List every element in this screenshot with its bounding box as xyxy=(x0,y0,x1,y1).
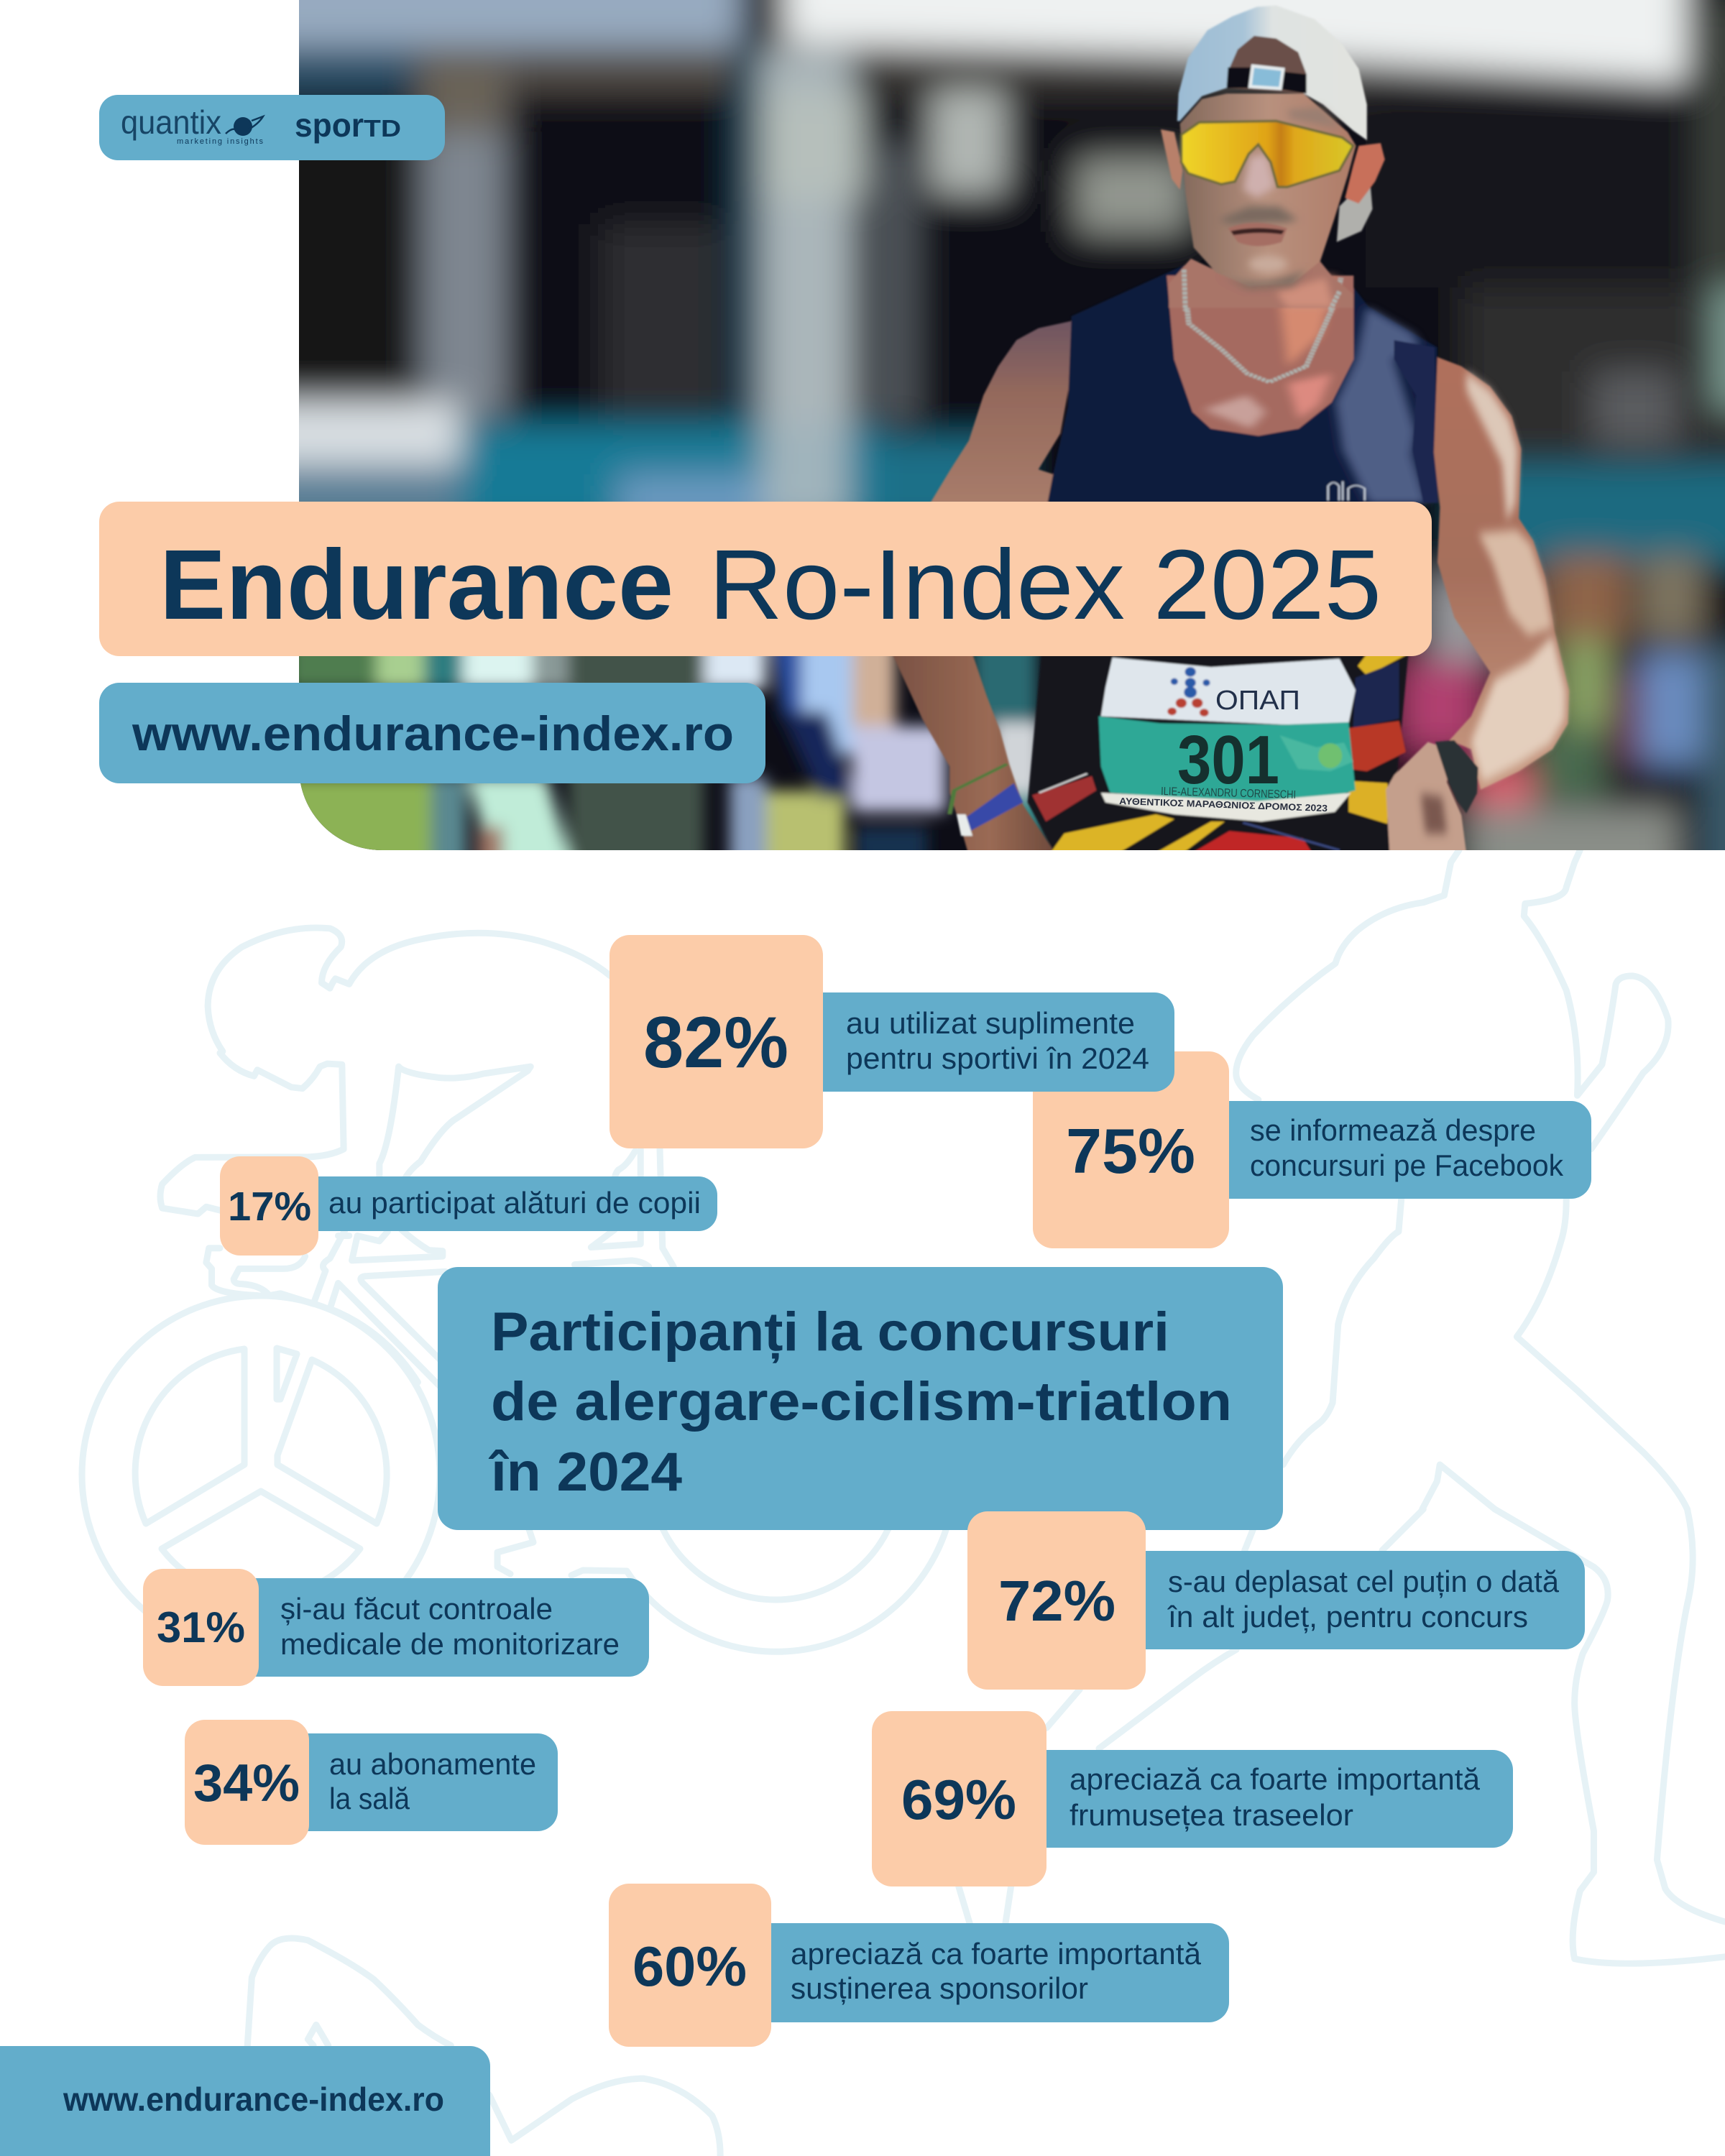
arm base xyxy=(1434,357,1569,790)
chest pink xyxy=(1288,374,1332,419)
emblem red dots xyxy=(1167,699,1209,717)
head through cap opening xyxy=(1227,36,1307,93)
left ear xyxy=(1161,129,1182,190)
cyclist front wheel xyxy=(82,1296,440,1654)
stat box xyxy=(967,1511,1146,1690)
logo pill xyxy=(99,95,445,160)
stat: 69% route beauty xyxy=(872,1711,1513,1886)
central heading panel xyxy=(438,1267,1283,1530)
sunglasses xyxy=(1182,121,1353,187)
stat box xyxy=(143,1569,259,1686)
footer url: www.endurance-index.ro xyxy=(63,2081,444,2118)
chest highlight xyxy=(1276,275,1335,367)
strap left xyxy=(1227,68,1254,88)
lips xyxy=(1228,223,1287,247)
bib name: ILIE-ALEXANDRU CORNESCHI xyxy=(1161,786,1296,801)
stat value: 17% xyxy=(228,1184,311,1230)
stat pill xyxy=(1025,1750,1513,1848)
stat box xyxy=(872,1711,1046,1886)
bib race text: ΑΥΘΕΝΤΙΚΟΣ ΜΑΡΑΘΩΝΙΟΣ ΔΡΟΜΟΣ 2023 xyxy=(1119,796,1328,814)
shorts yellow 2 xyxy=(1156,821,1225,852)
sportd wordmark: spor xyxy=(295,106,364,144)
runner figure xyxy=(892,6,1569,852)
necklace upper xyxy=(1184,270,1340,310)
necklace xyxy=(1185,273,1341,382)
stat pill xyxy=(288,1733,558,1831)
heading panel background xyxy=(438,1267,1283,1530)
left upper arm xyxy=(930,321,1072,503)
stat text: au utilizat suplimente xyxy=(846,1006,1135,1040)
shorts line xyxy=(1243,823,1340,850)
stat value: 75% xyxy=(1066,1115,1195,1187)
side navy xyxy=(1353,661,1399,728)
stat value: 60% xyxy=(632,1935,747,1998)
stat pill xyxy=(1124,1551,1585,1649)
stat text xyxy=(1167,1565,1560,1634)
bib bottom strip xyxy=(1101,793,1351,821)
emblem blue dots xyxy=(1171,667,1210,698)
stat pill xyxy=(1229,1101,1591,1199)
stat text: au abonamente xyxy=(329,1747,536,1781)
stat: 34% gym xyxy=(185,1720,558,1845)
face xyxy=(1180,93,1356,286)
torso tank top xyxy=(1048,264,1438,503)
stat value: 69% xyxy=(901,1768,1016,1831)
chest pale xyxy=(1203,395,1266,428)
sportd wordmark: TD xyxy=(364,115,401,142)
chin light xyxy=(1248,256,1287,272)
cyclist body outline xyxy=(160,928,673,1386)
stat: 60% sponsors xyxy=(609,1884,1229,2047)
right ear xyxy=(1345,143,1385,203)
blue wristband xyxy=(963,783,1023,831)
stat text: apreciază ca foarte importantă xyxy=(1070,1762,1481,1796)
mouth dark line xyxy=(1230,228,1284,235)
rear wheel inner ring xyxy=(650,1350,901,1600)
head xyxy=(1161,6,1385,310)
shorts stripes white xyxy=(1039,773,1087,793)
stat pill xyxy=(237,1578,649,1677)
background outline: runner xyxy=(959,850,1725,1963)
neck highlight xyxy=(1276,278,1334,308)
stat box xyxy=(220,1156,318,1256)
stat: 31% medical checks xyxy=(143,1569,649,1686)
stat text xyxy=(846,1006,1149,1075)
bib number: 301 xyxy=(1177,722,1279,798)
runner upper body outline xyxy=(1236,850,1688,1509)
bracelet xyxy=(949,764,1007,814)
left forearm and wrist xyxy=(892,654,1408,852)
heading text: în 2024 xyxy=(488,1442,682,1503)
chest and neck xyxy=(1167,273,1353,436)
pedal detail xyxy=(497,1527,627,1575)
shoulder highlight xyxy=(1466,372,1518,522)
title banner background xyxy=(99,502,1432,656)
stat text xyxy=(329,1747,536,1815)
stat value: 82% xyxy=(643,1003,788,1083)
stat value: 72% xyxy=(998,1569,1116,1633)
side top yellow xyxy=(1358,654,1408,676)
strap buckle xyxy=(1250,66,1283,88)
stat text: pentru sportivi în 2024 xyxy=(846,1041,1149,1075)
sportd wordmark xyxy=(295,106,401,144)
website pill background xyxy=(99,683,765,783)
heading text: Participanți la concursuri xyxy=(491,1302,1169,1363)
stat text: în alt județ, pentru concurs xyxy=(1167,1600,1528,1634)
bib flag xyxy=(1280,735,1353,771)
stat box xyxy=(185,1720,309,1845)
title bold part: Endurance xyxy=(160,530,673,640)
stubble xyxy=(1218,270,1307,289)
runner lower body outline xyxy=(959,1509,1725,1963)
stat box xyxy=(610,935,823,1148)
stat: 17% with children xyxy=(220,1156,717,1256)
heading text xyxy=(488,1302,1232,1503)
stat box xyxy=(1033,1051,1229,1248)
shorts red xyxy=(1192,831,1312,852)
website url: www.endurance-index.ro xyxy=(132,706,734,761)
footer tab background xyxy=(0,2046,490,2156)
stat text xyxy=(280,1592,620,1661)
marketing insights tagline: marketing insights xyxy=(177,137,263,146)
tank logo xyxy=(1328,482,1365,500)
cap back flap xyxy=(1337,176,1372,242)
title banner xyxy=(99,502,1432,656)
dark torso strip xyxy=(1028,654,1408,852)
stat value: 31% xyxy=(157,1603,245,1651)
stat text: medicale de monitorizare xyxy=(280,1627,620,1661)
heading text: de alergare-ciclism-triatlon xyxy=(491,1371,1232,1432)
cyclist rear wheel xyxy=(627,1530,946,1651)
side red xyxy=(1348,721,1406,771)
stat: 82% supplements xyxy=(610,935,1174,1148)
background outline: swimmer xyxy=(247,1938,720,2156)
logo pill background xyxy=(99,95,445,160)
shorts yellow 1 xyxy=(1051,814,1174,852)
right arm xyxy=(1434,357,1569,790)
white tab xyxy=(957,814,972,836)
stat text: la sală xyxy=(329,1782,410,1815)
tank grey side xyxy=(1335,307,1427,503)
website pill xyxy=(99,683,765,783)
stat text: frumusețea traseelor xyxy=(1070,1798,1353,1832)
quantix wordmark: quantix xyxy=(121,103,221,141)
tank armhole strap xyxy=(1394,340,1438,503)
footer website tab xyxy=(0,2046,490,2156)
stat text xyxy=(1070,1762,1481,1832)
neck skin xyxy=(1169,259,1353,308)
nose xyxy=(1243,154,1275,198)
shorts stripes red left xyxy=(1032,776,1096,821)
stat pill xyxy=(801,992,1174,1092)
stat pill xyxy=(750,1923,1229,2022)
hand over shorts xyxy=(1386,740,1478,852)
bib green sticker xyxy=(1318,743,1342,768)
side yellow xyxy=(1348,780,1388,824)
stat text xyxy=(791,1937,1202,2005)
tank navy xyxy=(1048,264,1438,503)
triceps highlight xyxy=(1478,530,1552,635)
forearm highlight xyxy=(1471,635,1565,782)
bib text opap: ΟΠΑΠ xyxy=(1215,686,1300,716)
stat: 72% travel xyxy=(967,1511,1585,1690)
quantix planet icon xyxy=(226,116,263,136)
stat text xyxy=(1250,1113,1564,1182)
moustache shadow xyxy=(1218,206,1298,224)
front wheel spokes xyxy=(135,1348,387,1598)
strap right xyxy=(1282,72,1307,93)
stat text: și-au făcut controale xyxy=(280,1592,553,1626)
blurred background xyxy=(244,0,1725,894)
stat text: se informează despre xyxy=(1250,1113,1536,1147)
stat text: s-au deplasat cel puțin o dată xyxy=(1168,1565,1560,1598)
cap xyxy=(1177,6,1367,140)
stat text: susținerea sponsorilor xyxy=(791,1971,1088,2005)
bib teal xyxy=(1099,717,1356,803)
stat text: concursuri pe Facebook xyxy=(1250,1148,1564,1182)
stat: 75% Facebook xyxy=(1033,1051,1591,1248)
forearm skin xyxy=(892,654,1055,852)
stat box xyxy=(609,1884,771,2047)
stat text: apreciază ca foarte importantă xyxy=(791,1937,1202,1971)
title regular part: Ro-Index 2025 xyxy=(709,530,1381,640)
stat text: au participat alături de copii xyxy=(328,1186,701,1220)
background outline: cyclist xyxy=(82,928,946,1654)
chest skin xyxy=(1167,275,1353,436)
hero photo: runner at race xyxy=(244,0,1725,894)
lower left background xyxy=(299,656,1049,850)
stat pill xyxy=(297,1176,717,1231)
forehead highlight xyxy=(1287,107,1342,129)
bib white xyxy=(1101,658,1356,724)
stat value: 34% xyxy=(193,1754,300,1812)
